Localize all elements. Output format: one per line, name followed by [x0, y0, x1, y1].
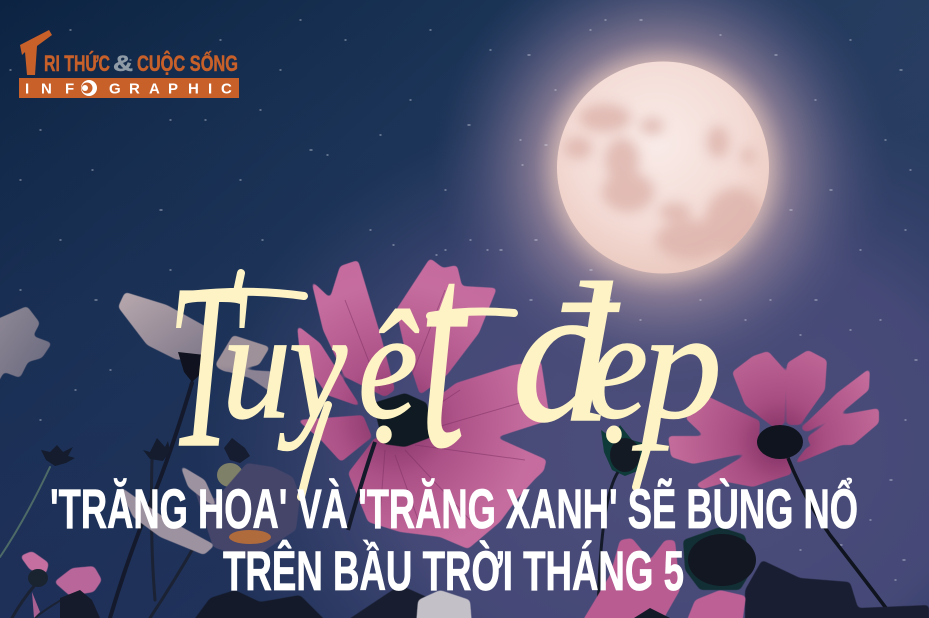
logo T mark	[20, 30, 52, 75]
script title: đ	[512, 243, 620, 464]
script title: u	[222, 279, 291, 451]
big pink flower	[297, 258, 550, 549]
bottom foliage silhouette	[190, 527, 929, 618]
full moon	[554, 58, 772, 276]
logo wordmark: RI THỨC	[44, 51, 110, 76]
logo: C	[221, 80, 232, 98]
script flourishes	[188, 273, 659, 497]
script title: p	[632, 279, 722, 451]
grey flower	[118, 292, 282, 395]
script title	[168, 191, 722, 507]
script title: ẹ	[588, 279, 648, 451]
logo infographic bar	[19, 78, 239, 98]
logo: H	[188, 80, 199, 98]
subtitle: TRÊN BẦU TRỜI THÁNG 5	[223, 539, 684, 602]
script title: T	[168, 236, 248, 496]
logo: F	[65, 80, 74, 98]
script title: y	[278, 279, 347, 451]
logo	[19, 30, 239, 98]
script title: ệ	[358, 279, 419, 451]
far left pale flower	[0, 306, 52, 388]
bud under title	[598, 425, 650, 618]
logo: I	[25, 80, 29, 98]
right pink flower	[668, 350, 892, 616]
logo wordmark: &	[113, 51, 133, 76]
stems left	[0, 383, 195, 618]
subtitle	[50, 477, 874, 602]
logo: N	[41, 80, 52, 98]
white flower lower left	[118, 463, 300, 560]
script title: t	[420, 191, 471, 507]
logo: R	[129, 80, 140, 98]
small pink flowers	[20, 551, 102, 618]
logo: P	[168, 80, 178, 98]
logo: G	[109, 80, 121, 98]
logo wordmark: CUỘC SỐNG	[137, 50, 238, 76]
bottom pink flower	[416, 538, 746, 618]
left buds	[41, 438, 250, 487]
logo: I	[208, 80, 212, 98]
logo swirl O icon	[81, 80, 97, 96]
logo: A	[149, 80, 160, 98]
